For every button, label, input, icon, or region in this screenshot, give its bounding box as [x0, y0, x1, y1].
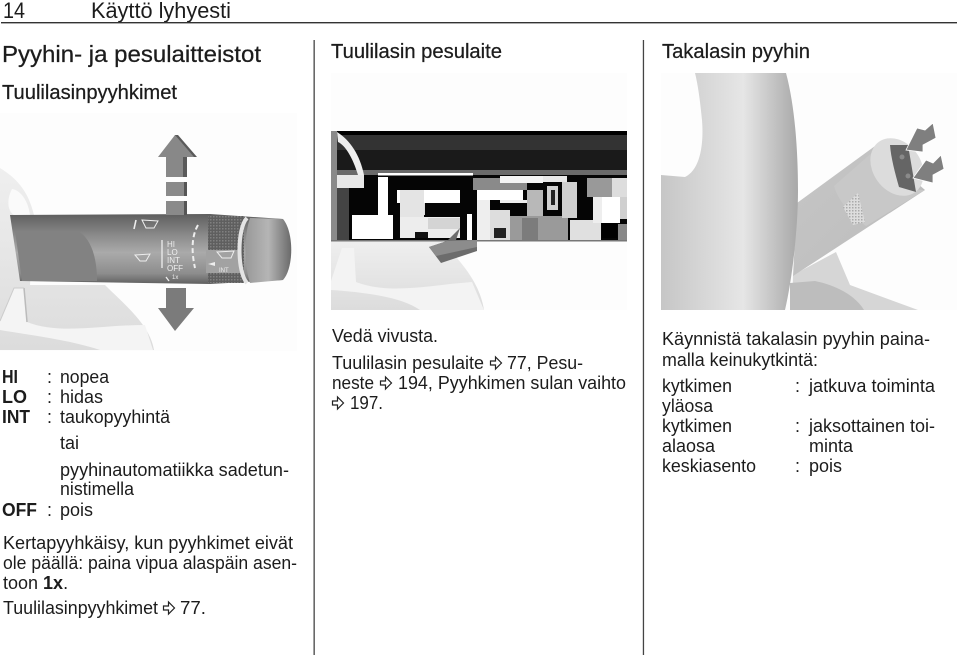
end cap [246, 218, 291, 283]
knurled grip [843, 193, 865, 225]
arrow up [158, 135, 197, 215]
references: washer [332, 353, 626, 413]
legend: wiper positions: hidas [60, 387, 103, 407]
steering wheel spoke [661, 73, 798, 310]
legend: rear wiper switch: pois [809, 456, 842, 476]
legend: wiper positions: pyyhinautomatiikka sadetun- [60, 460, 289, 480]
subheading: Tuulilasinpyyhkimet: Tuulilasinpyyhkimet [2, 82, 177, 104]
stalk symbols: OFF [167, 264, 183, 273]
washer mechanism blocks [337, 173, 627, 240]
legend: rear wiper switch: kytkimen [662, 416, 732, 436]
legend: wiper positions: LO [2, 387, 27, 407]
legend: wiper positions: tai [60, 433, 79, 453]
paragraph: rear wiper: malla keinukytkintä: [662, 350, 818, 370]
legend: rear wiper switch: kytkimen [662, 376, 732, 396]
stalk symbols: INT [167, 256, 180, 265]
collar [834, 150, 925, 226]
stalk [793, 146, 925, 276]
paragraph: single wipe: toon 1x. [3, 573, 68, 593]
legend: wiper positions: nopea [60, 367, 110, 387]
legend: rear wiper switch [662, 376, 936, 476]
text: pull lever: Vedä vivusta. [332, 326, 438, 346]
legend: wiper positions: taukopyyhintä [60, 407, 171, 427]
legend: wiper positions: : [47, 500, 52, 520]
arrow down [158, 288, 194, 331]
stalk symbols [134, 220, 234, 281]
page header [1, 0, 957, 23]
arrow lower [913, 155, 944, 183]
legend: rear wiper switch: : [795, 456, 800, 476]
illustration: windscreen washer stalk pulled, high contrast [331, 73, 627, 310]
knurled ring [208, 216, 244, 283]
heading: Pyyhin- ja pesulaitteistot: Pyyhin- ja pesulaitteistot [2, 41, 261, 67]
stalk symbols: HI [167, 240, 175, 249]
paragraph: rear wiper: Käynnistä takalasin pyyhin paina- [662, 329, 930, 349]
stalk symbols: 1x [172, 275, 178, 281]
legend: wiper positions: INT [2, 407, 30, 427]
legend: rear wiper switch: jatkuva toiminta [808, 376, 936, 396]
stalk body [10, 214, 283, 284]
illustration: wiper stalk with up and down arrows [0, 113, 297, 351]
legend: rear wiper switch: keskiasento [662, 456, 756, 476]
paragraph: single wipe [3, 533, 297, 593]
legend: wiper positions: nistimella [60, 479, 135, 499]
references: washer: Tuulilasin pesulaite [332, 353, 484, 373]
stalk end [859, 128, 935, 206]
arrow pointing at stalk [429, 228, 477, 263]
lower trim shape [792, 252, 918, 310]
legend: rear wiper switch: jaksottainen toi- [808, 416, 935, 436]
paragraph: single wipe: Kertapyyhkäisy, kun pyyhkimet eivät [3, 533, 293, 553]
dark dashboard band [331, 131, 627, 241]
legend: wiper positions: : [47, 387, 52, 407]
subheading: Tuulilasin pesulaite: Tuulilasin pesulaite [331, 41, 502, 63]
subheading: Takalasin pyyhin: Takalasin pyyhin [662, 41, 810, 63]
legend: rear wiper switch: alaosa [662, 436, 716, 456]
reference: windscreen wipers: Tuulilasinpyyhkimet [3, 598, 158, 618]
legend: wiper positions: : [47, 367, 52, 387]
white ring [240, 218, 247, 283]
legend: rear wiper switch: : [795, 376, 800, 396]
references: washer: 77, Pesu- [507, 353, 583, 373]
paragraph: rear wiper [662, 329, 930, 370]
legend: rear wiper switch: minta [809, 436, 854, 456]
references: washer: 197. [350, 393, 383, 413]
legend: wiper positions: HI [2, 367, 18, 387]
references: washer: neste [332, 373, 374, 393]
illustration: rear wiper stalk with rocker switch [661, 73, 957, 310]
stalk symbols: LO [167, 248, 178, 257]
references: washer: 194, Pyyhkimen sulan vaihto [398, 373, 626, 393]
legend: wiper positions: OFF [2, 500, 37, 520]
steering wheel shape [331, 240, 484, 310]
reference: windscreen wipers: 77. [180, 598, 206, 618]
arrow upper [906, 123, 936, 152]
stalk symbols: INT [219, 268, 229, 274]
rocker switch [890, 145, 916, 192]
legend: rear wiper switch: : [795, 416, 800, 436]
paragraph: single wipe: ole päällä: paina vipua alaspäin asen- [3, 553, 297, 573]
legend: wiper positions: : [47, 407, 52, 427]
steering wheel shape [0, 168, 154, 350]
legend: wiper positions [2, 367, 289, 520]
legend: wiper positions: pois [60, 500, 93, 520]
legend: rear wiper switch: yläosa [662, 396, 714, 416]
